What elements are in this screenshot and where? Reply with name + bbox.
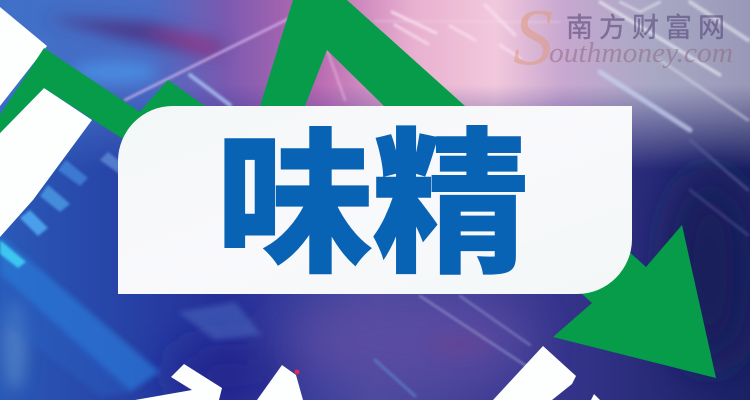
- light blue column: [0, 235, 160, 392]
- small candles: [0, 68, 125, 268]
- white arrow bottom left: [135, 364, 222, 400]
- watermark: [513, 0, 733, 82]
- white arrow bottom right: [493, 346, 576, 400]
- white band left: [0, 88, 92, 237]
- title text: 味精: [216, 119, 528, 293]
- white band top left: [0, 7, 47, 106]
- white arrow bottom centre: [257, 365, 303, 400]
- watermark latin: outhmoney.com: [549, 38, 733, 69]
- white arrow shapes: [0, 7, 600, 400]
- red glow dot: [294, 370, 300, 374]
- watermark chinese: 南方财富网: [566, 13, 731, 43]
